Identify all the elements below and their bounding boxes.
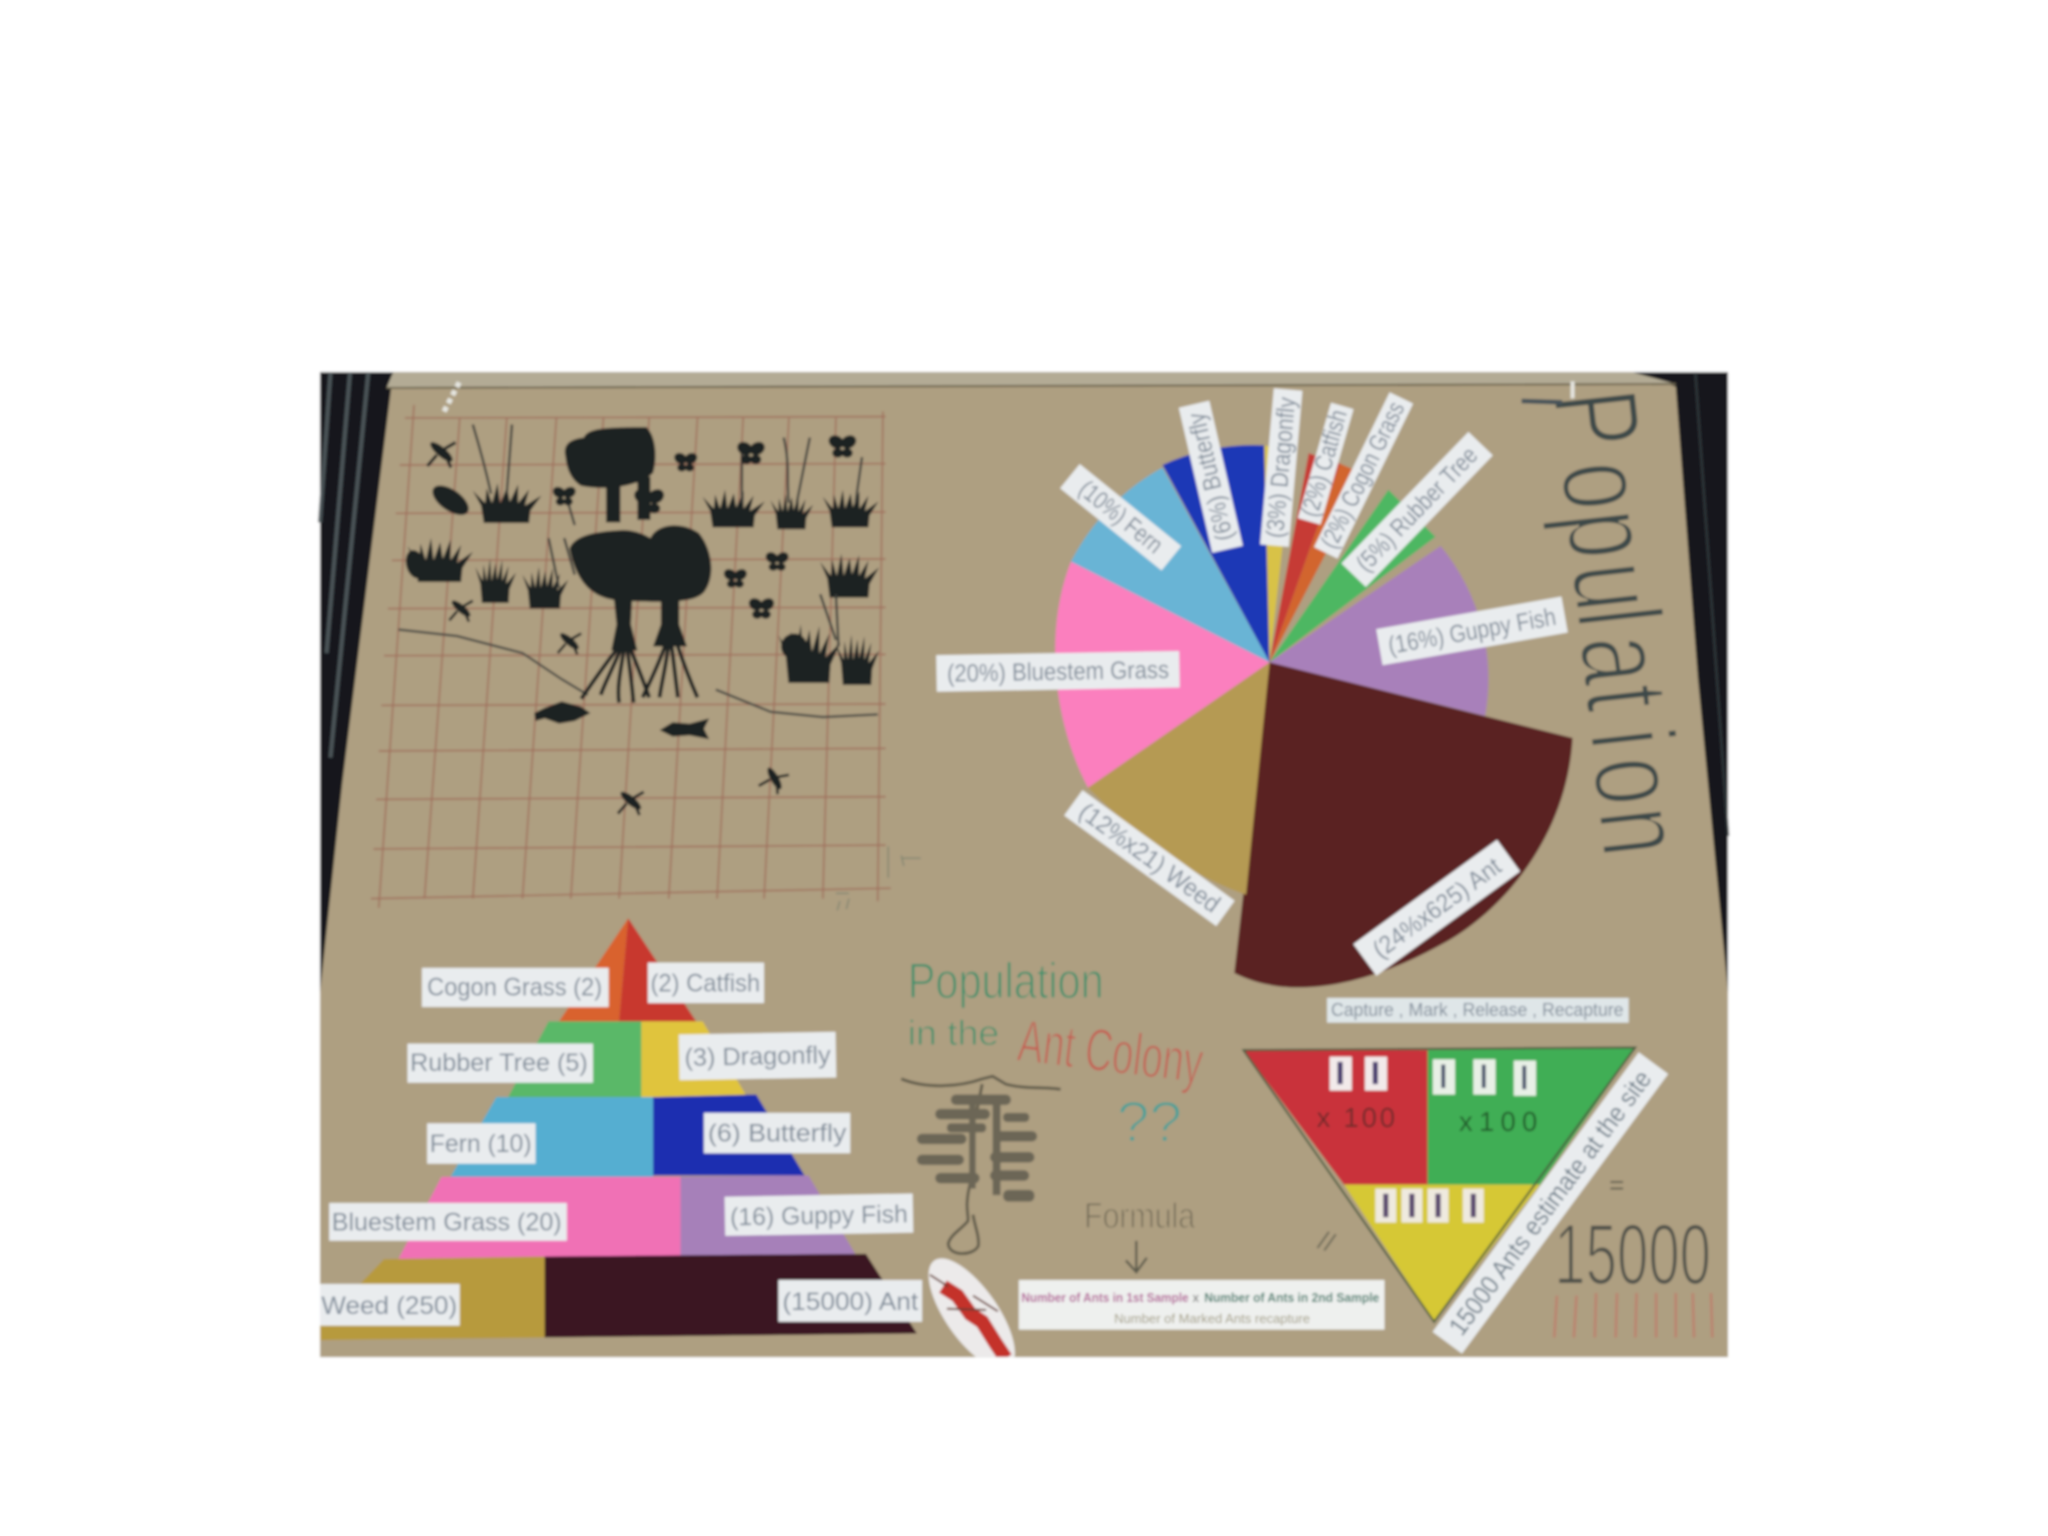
small trees (565, 427, 655, 522)
diagonal label: 15000 Ants estimate at the site (1443, 1064, 1657, 1341)
cardboard poster (320, 372, 1728, 1357)
label: guppy fish 16: (16) Guppy Fish (730, 1201, 908, 1231)
label: weed 250: Weed (250) (321, 1293, 457, 1320)
label: bluestem grass 20 (329, 1203, 567, 1241)
slice: rubber tree (1270, 490, 1435, 662)
label: catfish 2 (648, 963, 764, 1003)
fish (534, 701, 709, 739)
pie chart (936, 388, 1573, 987)
slice: catfish (1270, 453, 1340, 662)
tier: weed and ant (320, 1254, 917, 1340)
slice: fern (1071, 468, 1270, 662)
label: rubber tree 5 (408, 1044, 593, 1083)
panel: capture-recapture triangle (1243, 1048, 1668, 1354)
multiplier: green: x100 (1459, 1106, 1537, 1137)
title: Population vertical: Population (1527, 383, 1711, 862)
label: weed: (12%x21) Weed (1074, 798, 1225, 918)
label: ant: (24%x625) Ant (1368, 853, 1507, 964)
label: weed 250 (320, 1284, 460, 1326)
formula box (1019, 1280, 1384, 1330)
label: cogon grass 2: Cogon Grass (2) (427, 974, 602, 1001)
label: capture mark release recapture: Capture , Mark , Release , Recapture (1331, 999, 1624, 1020)
formula box: x (1192, 1290, 1199, 1305)
label: guppy fish: (16%) Guppy Fish (1386, 604, 1558, 660)
arrow: formula down (1126, 1241, 1147, 1272)
slice: ant (1234, 662, 1573, 987)
heading: in the: in the (908, 1014, 999, 1053)
ground line (398, 630, 878, 717)
triangle section: red (1243, 1050, 1428, 1185)
panel: ecosystem grid with silhouettes (371, 405, 921, 910)
label: rubber tree 5: Rubber Tree (5) (410, 1050, 588, 1077)
heading: Population: Population (908, 953, 1104, 1009)
tier: bluestem grass and guppy fish (398, 1176, 857, 1259)
label: cogon grass (1313, 392, 1413, 559)
formula box: Number of Ants in 1st Sample (1021, 1290, 1189, 1305)
label: dragonfly: (3%) Dragonfly (1262, 396, 1301, 539)
slice: bluestem grass (1055, 562, 1270, 788)
equals sign left: // (1315, 1225, 1339, 1258)
label: dragonfly 3: (3) Dragonfly (684, 1042, 832, 1072)
label: cogon grass 2 (422, 968, 609, 1007)
tier: cogon grass and catfish (559, 918, 696, 1021)
tags: ants in green section (1433, 1059, 1536, 1096)
tags: ants in red section (1330, 1057, 1387, 1091)
result: 15000: 15000 (1554, 1207, 1711, 1303)
heading: Ant Colony: Ant Colony (1015, 1007, 1207, 1096)
label: bluestem grass: (20%) Bluestem Grass (947, 657, 1169, 688)
label: dragonfly 3 (679, 1032, 836, 1080)
label: fern 10: Fern (10) (430, 1131, 532, 1158)
dark board frame (320, 372, 1728, 1357)
large mangrove trees (569, 525, 711, 703)
label: butterfly 6: (6) Butterfly (708, 1121, 847, 1148)
label: catfish 2: (2) Catfish (650, 970, 760, 997)
label: cogon grass: (2%) Cogon Grass (1316, 398, 1410, 553)
label: fern: (10%) Fern (1073, 476, 1168, 559)
label: guppy fish 16 (725, 1193, 913, 1236)
label: ant 15000 (778, 1280, 922, 1322)
question marks: ?? (1117, 1091, 1182, 1155)
slice: dragonfly (1264, 445, 1293, 662)
red quadrat grid (371, 405, 891, 908)
insects (427, 433, 859, 815)
label: bluestem grass 20: Bluestem Grass (20) (332, 1209, 562, 1236)
formula box: Number of Ants in 2nd Sample (1204, 1290, 1379, 1305)
slice: butterfly (1162, 445, 1270, 662)
tally marks (1554, 1293, 1712, 1337)
icon: red ant cutout (926, 1256, 1017, 1358)
label: catfish: (2%) Catfish (1297, 407, 1353, 520)
triangle section: yellow (1344, 1185, 1540, 1322)
multiplier: red: x 100 (1317, 1102, 1395, 1133)
label: bluestem grass (936, 651, 1180, 692)
label: fern 10 (427, 1123, 536, 1164)
panel: ant colony heading (908, 953, 1207, 1155)
triangle section: green (1428, 1048, 1635, 1185)
scale marks (836, 846, 921, 910)
grass clumps and reeds (403, 424, 879, 685)
slice: weed (1088, 662, 1270, 895)
label: butterfly: (6%) Butterfly (1183, 409, 1239, 543)
slice: guppy fish (1270, 546, 1488, 716)
formula box: Number of Marked Ants recapture (1114, 1311, 1310, 1326)
label: butterfly 6 (704, 1113, 850, 1153)
tier: rubber tree and dragonfly (508, 1021, 747, 1097)
icon: ant colony tunnels drawing (901, 1076, 1061, 1254)
label: ant 15000: (15000) Ant (782, 1289, 918, 1316)
slice: cogon grass (1270, 464, 1366, 662)
panel: food pyramid (320, 918, 922, 1340)
title: P stem extension (1522, 401, 1562, 402)
label: rubber tree: (5%) Rubber Tree (1351, 442, 1483, 577)
tags: ants in yellow section (1375, 1189, 1484, 1223)
formula heading: Formula (1084, 1195, 1196, 1236)
tier: fern and butterfly (451, 1095, 805, 1177)
poster photograph (316, 370, 1731, 1359)
result: equals: = (1609, 1170, 1624, 1200)
